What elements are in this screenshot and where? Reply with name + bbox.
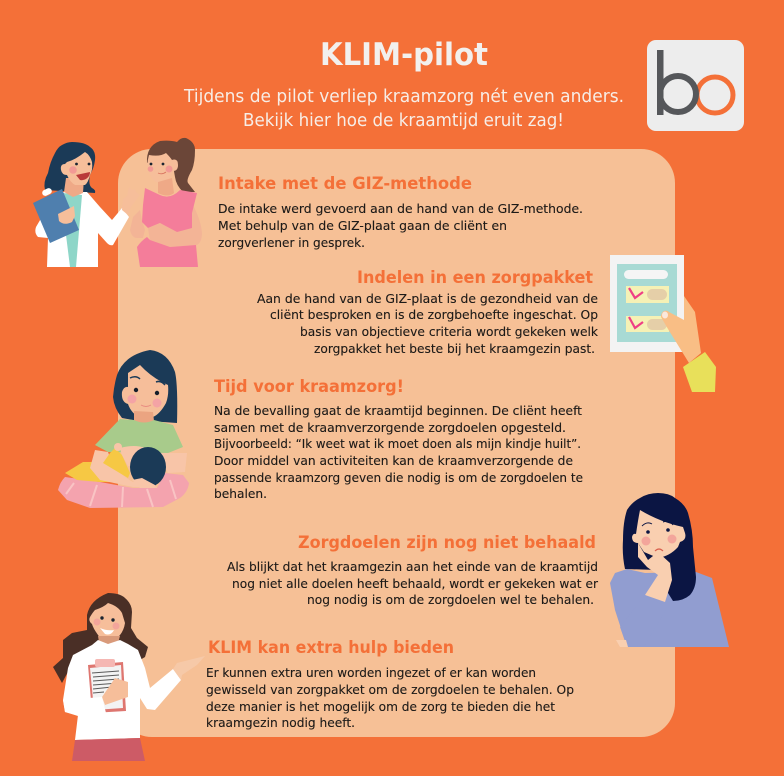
section: intake — [218, 174, 583, 250]
checklist row two — [626, 316, 669, 332]
section: intake: De intake werd gevoerd aan de hand van de GIZ-methode. — [218, 202, 583, 216]
section: zorgdoelen: Zorgdoelen zijn nog niet behaald — [298, 533, 596, 553]
section: zorgdoelen — [227, 533, 599, 607]
section: extra hulp: kraamgezin nodig heeft. — [206, 716, 355, 730]
subtitle: Tijdens de pilot verliep kraamzorg nét even anders. — [183, 87, 624, 107]
logo — [647, 40, 744, 131]
section: zorgpakket: cliënt besproken en is de zorgbehoefte ingeschat. Op — [270, 308, 598, 322]
title: KLIM-pilot — [320, 37, 488, 73]
checklist header — [624, 270, 668, 279]
section: extra hulp: gewisseld van zorgpakket om de zorgdoelen te behalen. Op — [206, 683, 574, 697]
illustration: checklist in hand — [610, 255, 716, 392]
section: tijd voor kraamzorg: Na de bevalling gaat de kraamtijd beginnen. De cliënt heeft — [214, 404, 582, 418]
illustration: doctor with notes — [53, 593, 205, 761]
section: zorgdoelen: Als blijkt dat het kraamgezin aan het einde van de kraamtijd — [227, 560, 598, 574]
section: zorgpakket: zorgpakket het beste bij het kraamgezin past. — [314, 342, 595, 356]
illustration: doctor with clipboard — [33, 142, 140, 267]
section: zorgpakket: basis van objectieve criteria wordt gekeken welk — [300, 325, 599, 339]
hand — [661, 296, 701, 363]
section: tijd voor kraamzorg: passende kraamzorg geven die nodig is om de zorgdoelen te — [214, 471, 583, 485]
illustration: pregnant woman — [130, 138, 202, 267]
panel: content card — [118, 149, 675, 737]
section: extra hulp: KLIM kan extra hulp bieden — [208, 638, 454, 658]
section: tijd voor kraamzorg: Tijd voor kraamzorg! — [214, 377, 404, 397]
section: tijd voor kraamzorg — [214, 377, 583, 501]
subtitle: Bekijk hier hoe de kraamtijd eruit zag! — [243, 111, 564, 131]
section: zorgdoelen: nog nodig is om de zorgdoelen wel te behalen. — [307, 593, 594, 607]
section: intake: zorgverlener in gesprek. — [218, 236, 365, 250]
checklist sheet — [617, 264, 677, 342]
checklist row one — [626, 286, 669, 303]
section: extra hulp: Er kunnen extra uren worden ingezet of er kan worden — [206, 666, 536, 680]
section: zorgpakket: Indelen in een zorgpakket — [357, 268, 593, 288]
section: intake: Met behulp van de GIZ-plaat gaan de cliënt en — [218, 219, 507, 233]
section: intake: Intake met de GIZ-methode — [218, 174, 472, 194]
section: extra hulp — [206, 638, 574, 730]
section: zorgpakket — [257, 268, 599, 356]
section: tijd voor kraamzorg: behalen. — [214, 487, 267, 501]
section: zorgdoelen: nog niet alle doelen heeft behaald, wordt er gekeken wat er — [232, 577, 599, 591]
subtitle — [183, 87, 624, 131]
sleeve — [683, 352, 716, 392]
illustration: nursing mother — [58, 350, 189, 508]
section: tijd voor kraamzorg: samen met de kraamverzorgende zorgdoelen opgesteld. — [214, 421, 566, 435]
section: zorgpakket: Aan de hand van de GIZ-plaat is de gezondheid van de — [257, 292, 598, 306]
section: tijd voor kraamzorg: Bijvoorbeeld: “Ik weet wat ik moet doen als mijn kindje huilt”. — [214, 437, 581, 451]
section: extra hulp: deze manier is het mogelijk om de zorg te bieden die het — [206, 700, 555, 714]
paper — [610, 255, 684, 352]
illustration: worried woman — [610, 493, 729, 647]
section: tijd voor kraamzorg: Door middel van activiteiten kan de kraamverzorgende de — [214, 454, 573, 468]
